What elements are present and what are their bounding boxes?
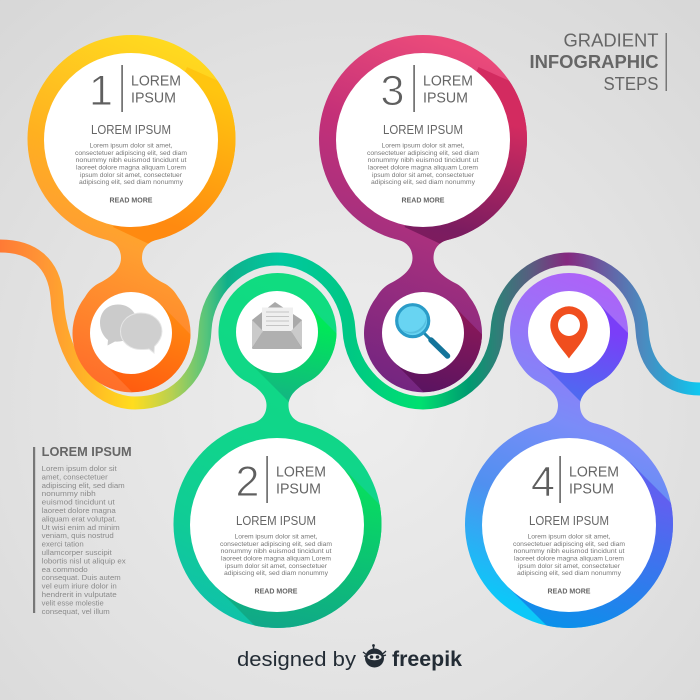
heading: LOREM IPSUM <box>91 123 171 137</box>
body: adipiscing elit, sed diam nonummy <box>79 179 184 186</box>
side body: lobortis nisl ut aliquip ex <box>42 556 126 565</box>
body: laoreet dolore magna aliquam Lorem <box>368 164 478 172</box>
icon: freepik logo <box>363 644 386 668</box>
body: laoreet dolore magna aliquam Lorem <box>514 556 624 562</box>
number: 4 <box>531 458 555 506</box>
white disc: step 2 <box>190 438 364 612</box>
heading: LOREM IPSUM <box>383 123 463 137</box>
panel: step 2 shape <box>173 272 383 630</box>
side bar <box>33 447 35 613</box>
label: LOREM <box>276 464 326 480</box>
title: GRADIENT <box>564 30 658 50</box>
white disc: step 4 <box>482 438 656 612</box>
body: nonummy nibh euismod tincidunt ut <box>368 157 479 164</box>
icon disc: step 3 <box>382 292 464 374</box>
body <box>513 534 625 577</box>
body: consectetuer adipiscing elit, sed diam <box>220 541 332 548</box>
step 3 text <box>367 65 479 204</box>
body <box>220 534 332 577</box>
step 2 text: IPSUM <box>276 480 321 498</box>
body: adipiscing elit, sed diam nonummy <box>517 570 622 577</box>
step 1 text <box>75 65 187 204</box>
step 1 text: IPSUM <box>131 90 176 106</box>
number: 2 <box>236 458 259 506</box>
panel: step 4 shape <box>465 272 675 630</box>
body: ipsum dolor sit amet, consectetuer <box>225 563 327 570</box>
body: adipiscing elit, sed diam nonummy <box>224 570 329 577</box>
divider <box>121 65 123 112</box>
body: Lorem ipsum dolor sit amet, <box>90 142 173 150</box>
body: adipiscing elit, sed diam nonummy <box>371 179 476 186</box>
step 3 text: IPSUM <box>423 90 468 106</box>
side body: ullamcorper suscipit <box>42 548 112 557</box>
side body: veniam, quis nostrud <box>42 531 114 540</box>
body: Lorem ipsum dolor sit amet, <box>382 142 465 150</box>
footer text: designed by <box>237 649 356 671</box>
divider <box>413 65 415 112</box>
step 4 text: IPSUM <box>569 480 614 498</box>
brand name: freepik <box>392 648 462 671</box>
title <box>530 30 659 94</box>
title: STEPS <box>604 74 658 94</box>
title: INFOGRAPHIC <box>530 52 659 72</box>
body: consectetuer adipiscing elit, sed diam <box>367 150 479 157</box>
side body: velit esse molestie <box>42 598 104 607</box>
heading: LOREM IPSUM <box>529 514 609 528</box>
icon disc: step 1 <box>90 292 172 374</box>
title divider <box>666 33 667 91</box>
side body: vel eum iriure dolor in <box>42 582 117 591</box>
white disc: step 1 <box>44 53 218 227</box>
white disc: step 3 <box>336 53 510 227</box>
side body: adipiscing elit, sed diam <box>42 481 125 490</box>
body: nonummy nibh euismod tincidunt ut <box>220 548 332 555</box>
side body: Lorem ipsum dolor sit <box>42 464 117 473</box>
divider <box>266 456 268 503</box>
icon: magnifier <box>397 305 448 356</box>
body <box>367 142 479 186</box>
step 2 text <box>220 456 332 596</box>
read more: READ MORE <box>548 586 591 596</box>
body: ipsum dolor sit amet, consectetuer <box>372 172 474 179</box>
side body: consequat. Duis autem <box>42 573 121 582</box>
icon: chat bubbles <box>100 304 162 353</box>
panel: step 3 shape <box>318 35 528 393</box>
body: laoreet dolore magna aliquam Lorem <box>221 556 331 562</box>
body: Lorem ipsum dolor sit amet, <box>234 534 318 540</box>
side body: hendrerit in vulputate <box>42 590 117 599</box>
icon: open envelope <box>252 302 302 349</box>
number: 3 <box>381 67 404 115</box>
panel: step 1 shape <box>27 35 237 393</box>
side body: laoreet dolore magna <box>42 506 117 515</box>
side body: ea commodo <box>42 565 88 574</box>
read more: READ MORE <box>254 586 298 596</box>
side body: aliquam erat volutpat. <box>42 514 117 523</box>
side body: exerci tation <box>42 540 84 549</box>
read more: READ MORE <box>110 196 153 204</box>
side body: euismod tincidunt ut <box>42 498 115 507</box>
body: laoreet dolore magna aliquam Lorem <box>76 164 186 172</box>
step 4 text <box>513 456 625 596</box>
wavy gradient ribbon <box>0 246 700 403</box>
body: ipsum dolor sit amet, consectetuer <box>518 563 620 570</box>
side body: nonummy nibh <box>42 489 96 498</box>
body: consectetuer adipiscing elit, sed diam <box>75 150 187 157</box>
icon disc: step 2 <box>236 291 318 373</box>
label: LOREM <box>569 464 619 480</box>
label: LOREM <box>131 72 181 90</box>
body: consectetuer adipiscing elit, sed diam <box>513 541 625 548</box>
icon: location pin <box>550 306 588 358</box>
body: nonummy nibh euismod tincidunt ut <box>76 157 187 164</box>
side text block <box>33 445 132 616</box>
body <box>75 142 187 186</box>
divider <box>559 456 561 503</box>
side body <box>42 464 126 616</box>
number: 1 <box>89 67 113 115</box>
read more: READ MORE <box>402 196 445 204</box>
footer: designed by freepik <box>237 644 462 671</box>
side body: Ut wisi enim ad minim <box>42 523 120 532</box>
side body: consequat, vel illum <box>42 607 110 616</box>
body: Lorem ipsum dolor sit amet, <box>528 534 611 540</box>
body: nonummy nibh euismod tincidunt ut <box>514 548 625 555</box>
side body: amet, consectetuer <box>42 472 108 481</box>
label: LOREM <box>423 72 473 90</box>
body: ipsum dolor sit amet, consectetuer <box>80 172 182 179</box>
side heading: LOREM IPSUM <box>42 445 132 459</box>
heading: LOREM IPSUM <box>236 514 316 528</box>
icon disc: step 4 <box>528 291 610 373</box>
